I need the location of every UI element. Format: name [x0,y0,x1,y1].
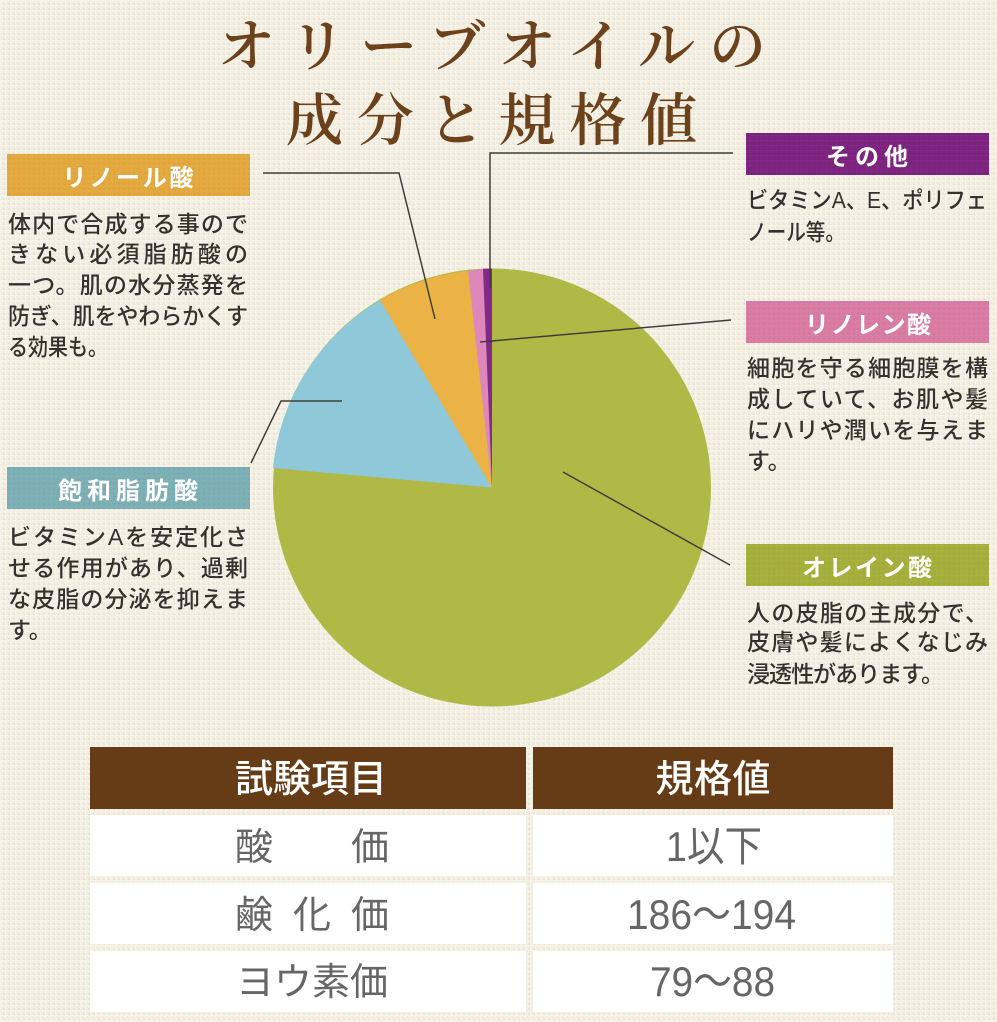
text: linoleic acid description: 一つ。肌の水分蒸発を [8,272,248,298]
text: saturated fatty acid description: な皮脂の分泌を抑えま [8,586,248,612]
text: oleic acid description: 人の皮脂の主成分で、 [747,600,988,626]
table header [90,747,893,809]
label: saturated fatty acid [7,467,250,509]
table row: acid value: 1以下 [666,823,762,870]
text: linolenic acid description: にハリや潤いを与えま [747,417,988,443]
label: linoleic acid: リノール酸 [62,165,194,192]
text: linoleic acid description: きない必須脂肪酸の [8,241,248,267]
table row: saponification value: 価 [351,895,389,937]
label: oleic acid: オレイン酸 [802,555,932,582]
text: saturated fatty acid description: せる作用があり、過剰 [8,555,248,581]
table row: acid value [90,815,893,876]
table row: acid value: 酸 [235,827,273,869]
table header: 規格値 [656,759,770,801]
text: linolenic acid description [747,355,988,474]
table row: saponification value: 化 [293,895,331,937]
text: oleic acid description: 浸透性があります。 [747,661,944,687]
title [218,16,766,153]
text: saturated fatty acid description: ビタミンAを安定化さ [8,524,248,550]
text: linoleic acid description: 防ぎ、肌をやわらかくす [8,303,248,329]
text: linolenic acid description: 成していて、お肌や髪 [747,386,988,412]
leader lines [251,153,733,565]
table: test items and standard values [90,747,893,1012]
text: oleic acid description [747,600,988,687]
table row: saponification value [90,883,893,944]
label: others: その他 [826,144,908,171]
table row: acid value: 価 [351,827,389,869]
text: others description: ノール等。 [747,219,845,245]
table row: iodine value [90,951,893,1012]
label: linolenic acid: リノレン酸 [805,312,931,339]
label: others [746,133,989,175]
text: linoleic acid description: 体内で合成する事ので [8,211,248,237]
panel: saturated fatty acid [7,467,250,643]
table row: saponification value: 鹸 [235,895,273,937]
table header: 試験項目 [235,759,387,801]
text: saturated fatty acid description: す。 [8,617,52,643]
panel: linolenic acid [746,301,989,474]
label: oleic acid [746,544,989,586]
label: linoleic acid [7,154,250,196]
panel: oleic acid [746,544,989,687]
text: linoleic acid description: る効果も。 [8,334,108,360]
panel: linoleic acid [7,154,250,360]
table row: iodine value: ヨウ素価 [236,962,388,1004]
text: linolenic acid description: す。 [747,448,791,474]
title: オリーブオイルの [218,16,766,79]
label: saturated fatty acid: 飽和脂肪酸 [58,478,198,505]
table row: iodine value: 79～88 [650,958,775,1005]
table row: saponification value: 186～194 [627,891,796,938]
label: linolenic acid [746,301,989,343]
text: others description [747,187,987,245]
text: linolenic acid description: 細胞を守る細胞膜を構 [747,355,988,381]
title: 成分と規格値 [286,90,697,153]
text: saturated fatty acid description [8,524,248,643]
text: oleic acid description: 皮膚や髪によくなじみ [747,629,988,655]
text: linoleic acid description [8,211,248,360]
pie chart [273,268,711,706]
panel: others [746,133,989,245]
